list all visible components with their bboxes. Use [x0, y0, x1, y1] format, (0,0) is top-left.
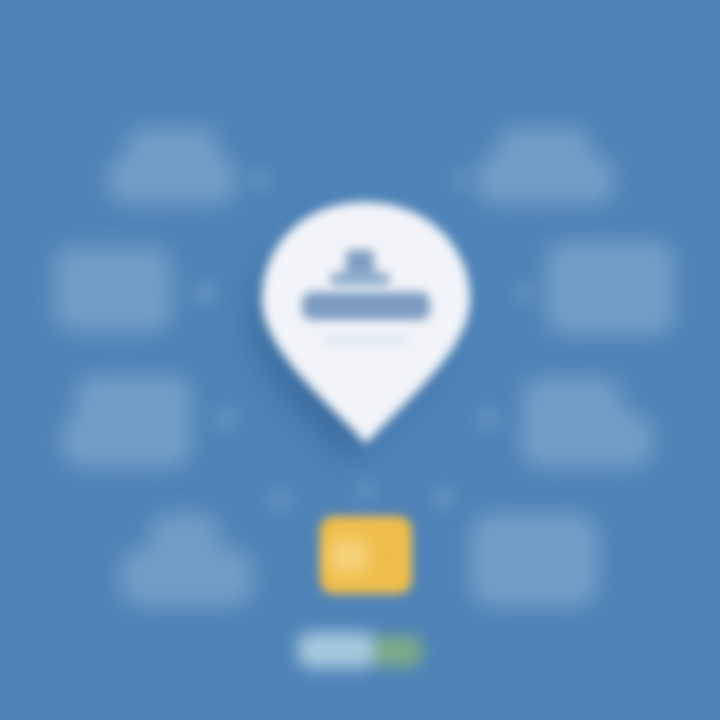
pin body [262, 202, 470, 444]
badge highlight [330, 540, 368, 572]
panel: middle right cloud [546, 242, 674, 334]
panel: top left cloud [108, 128, 236, 204]
panel: lower right cloud [520, 378, 654, 468]
pin shadow [252, 226, 452, 462]
icon: central location pin [262, 202, 470, 444]
yellow badge [320, 516, 412, 594]
panel: lower left cloud [62, 376, 192, 468]
pin sub text [322, 334, 410, 346]
connector dots [193, 169, 536, 512]
pin heading icon [330, 250, 390, 286]
pin heading text bar [302, 292, 430, 320]
logo text [298, 632, 422, 668]
panel: bottom right cloud [470, 514, 598, 606]
panel: bottom left cloud [120, 514, 254, 606]
panel: middle left cloud [54, 246, 172, 332]
panel: top right cloud [476, 128, 614, 204]
